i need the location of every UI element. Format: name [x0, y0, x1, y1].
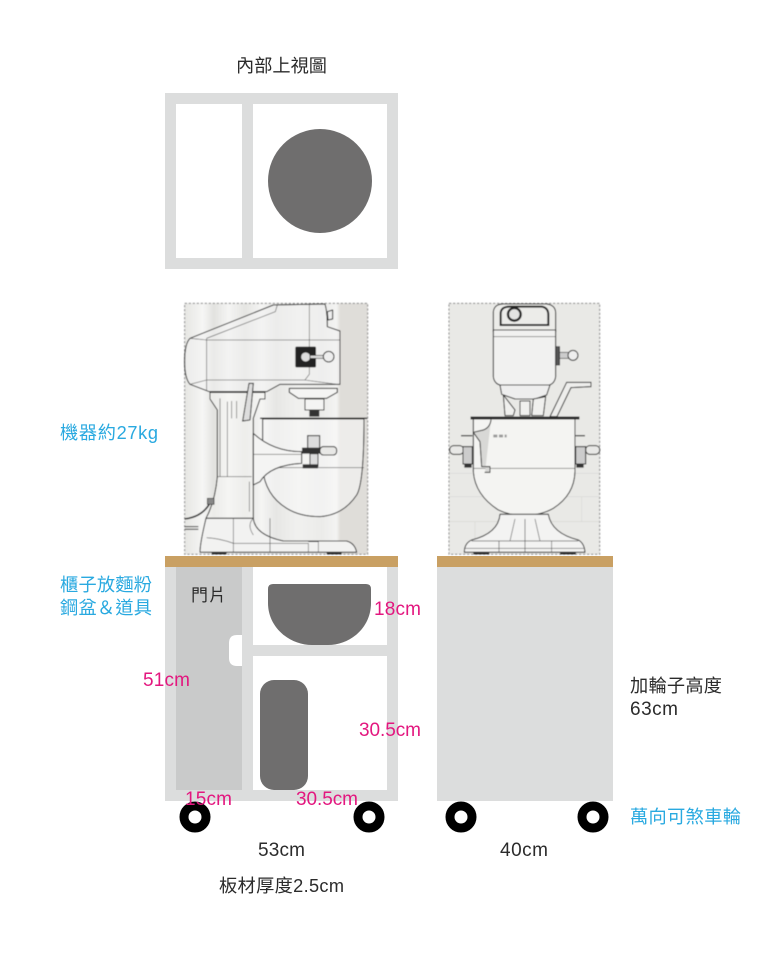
label: machine weight: 機器約27kg: [60, 423, 158, 443]
base: [464, 514, 585, 552]
upper compartment: [253, 566, 387, 645]
side handles: [461, 434, 585, 438]
label: cabinet contents: [60, 575, 152, 618]
lift lever: [243, 383, 253, 421]
door notch handle: [229, 635, 242, 666]
bowl arm: [253, 433, 302, 485]
label: height with wheels: 63cm: [630, 699, 678, 720]
bowl: [263, 419, 364, 517]
cord: [185, 502, 211, 519]
icon: bowl from above: [268, 129, 372, 233]
dimension labels: [143, 599, 421, 810]
icon: bowl side: [268, 584, 371, 645]
speed knob: [556, 347, 560, 365]
icon: stored tool: [260, 680, 308, 790]
dimension labels: 30.5cm: [359, 720, 421, 741]
label: height with wheels: [630, 676, 722, 720]
lift lever: [550, 382, 591, 417]
dimension labels: 51cm: [143, 670, 190, 691]
head: [493, 304, 556, 332]
label: casters: 萬向可煞車輪: [630, 807, 741, 827]
label: height with wheels: 加輪子高度: [630, 676, 722, 696]
bowl: [473, 419, 575, 516]
wooden top boards: [165, 556, 613, 567]
dimension labels: 18cm: [374, 599, 421, 620]
label: board thickness: 板材厚度2.5cm: [219, 876, 344, 896]
lower compartment: [253, 656, 387, 790]
bracket: [473, 420, 491, 472]
label: cabinet contents: 鋼盆＆道具: [60, 598, 152, 618]
label: depth: 40cm: [500, 840, 548, 861]
column and base fill: [200, 392, 357, 552]
speed control: [295, 347, 316, 367]
hub: [500, 385, 550, 399]
hub: [289, 388, 337, 398]
label: cabinet contents: 櫃子放麵粉: [60, 575, 152, 595]
panel: cabinet front section: [165, 566, 398, 801]
door panel: [176, 566, 242, 790]
illustration: mixer side view: [185, 303, 368, 554]
dimension labels: 15cm: [185, 789, 232, 810]
wheels: [184, 806, 604, 828]
panel: cabinet side: [437, 566, 613, 801]
illustration: mixer front view: [449, 303, 600, 554]
label: door: 門片: [191, 586, 226, 605]
dimension labels: 30.5cm: [296, 789, 358, 810]
head: [185, 304, 340, 392]
base: [200, 518, 357, 552]
label: width: 53cm: [258, 840, 305, 861]
column: [203, 392, 265, 548]
title: top view: 內部上視圖: [236, 56, 327, 76]
panel: top view cabinet: [165, 93, 398, 269]
